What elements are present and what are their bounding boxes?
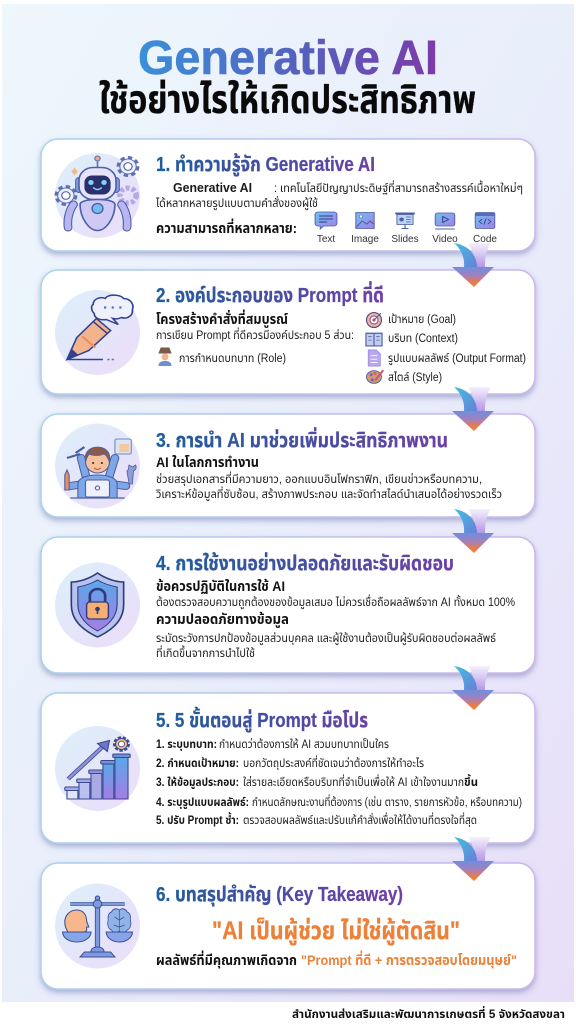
steps list: ขึ้น [464, 774, 478, 789]
item: output format [368, 350, 526, 366]
text block: การเขียน Prompt ที่ดีควรมีองค์ประกอบ 5 ส่วน: [156, 327, 354, 342]
panel 1: know generative AI [41, 139, 535, 251]
steps list: 4. ระบุรูปแบบผลลัพธ์: [156, 795, 249, 810]
icon: shield and padlock [55, 562, 140, 648]
text block: data safety: ระมัดระวังการปกป้องข้อมูลส่วนบุคคล และผู้ใช้งานต้องเป็นผู้รับผิดชอบต่อผลลัพธ์ [156, 631, 496, 645]
text block: : เทคโนโลยีปัญญาประดิษฐ์ที่สามารถสร้างสรรค์เนื้อหาใหม่ๆ [274, 180, 523, 195]
panel 3: productivity [41, 414, 535, 517]
text block [156, 309, 354, 342]
arrow 4 to 5 [452, 666, 494, 710]
icon: text [315, 212, 337, 245]
text block: ความสามารถที่หลากหลาย: [156, 218, 297, 236]
icon: video [432, 213, 458, 245]
item: role: การกำหนดบทบาท (Role) [179, 352, 286, 365]
arrow 3 to 4 [452, 509, 494, 553]
arrow 5 to 6 [452, 837, 494, 881]
icon: code: Code [473, 234, 497, 245]
heading: 5. 5 ขั้นตอนสู่ Prompt มือโปร [156, 707, 368, 732]
title [99, 32, 476, 122]
steps list: กำหนดว่าต้องการให้ AI สวมบทบาทเป็นใคร [219, 737, 389, 751]
item: output format: รูปแบบผลลัพธ์ (Output Format) [388, 352, 526, 365]
steps list [156, 737, 522, 827]
text block: Generative AI [173, 180, 252, 195]
text block: guidelines: ต้องตรวจสอบความถูกต้องของข้อมูลเสมอ ไม่ควรเชื่อถือผลลัพธ์จาก AI ทั้งหมด 100% [156, 594, 515, 609]
heading: 4. การใช้งานอย่างปลอดภัยและรับผิดชอบ [156, 553, 454, 575]
callout quote: "AI เป็นผู้ช่วย ไม่ใช่ผู้ตัดสิน" [212, 917, 460, 946]
panel 4: safe use [41, 537, 535, 673]
text block: data safety: ความปลอดภัยทางข้อมูล [156, 611, 289, 629]
text block: data safety [156, 611, 496, 660]
icon: robot [55, 153, 140, 238]
panel 5: five steps [41, 693, 535, 843]
icon: image: Image [351, 234, 379, 245]
text block: โครงสร้างคำสั่งที่สมบูรณ์ [156, 309, 288, 329]
arrow 2 to 3 [452, 387, 494, 431]
icon: slides [391, 212, 419, 245]
text block: วิเคราะห์ข้อมูลที่ซับซ้อน, สร้างภาพประกอบ และจัดทำสไลด์นำเสนอได้อย่างรวดเร็ว [156, 486, 502, 501]
steps list: ตรวจสอบผลลัพธ์และปรับแก้คำสั่งเพื่อให้ได้งานที่ตรงใจที่สุด [243, 812, 477, 827]
text block: "Prompt ที่ดี + การตรวจสอบโดยมนุษย์" [301, 950, 517, 969]
icon: balance scale [55, 884, 140, 968]
icon: video: Video [432, 234, 458, 245]
text block [156, 454, 502, 501]
steps list: บอกวัตถุประสงค์ที่ชัดเจนว่าต้องการให้ทำอะไร [243, 755, 424, 770]
panel 2: prompt elements [41, 270, 535, 394]
text block: ผลลัพธ์ที่มีคุณภาพเกิดจาก [156, 950, 297, 969]
item: goal: เป้าหมาย (Goal) [388, 313, 456, 326]
footer credit: สำนักงานส่งเสริมและพัฒนาการเกษตรที่ 5 จังหวัดสงขลา [292, 1006, 565, 1021]
steps list: กำหนดลักษณะงานที่ต้องการ (เช่น ตาราง, รายการหัวข้อ, หรือบทความ) [252, 794, 522, 809]
text block: guidelines [156, 578, 515, 609]
steps list: ใส่รายละเอียดหรือบริบทที่จำเป็นเพื่อให้ AI เข้าใจงานมาก [243, 774, 464, 789]
icon: multitasking person [55, 424, 140, 508]
title: Generative AI [138, 32, 438, 85]
icon: code [473, 212, 497, 245]
item: context: บริบท (Context) [388, 333, 458, 345]
heading: 1. ทำความรู้จัก Generative AI [156, 154, 375, 176]
item: style [367, 370, 442, 384]
steps list: 3. ให้ข้อมูลประกอบ: [156, 775, 239, 790]
text block: AI ในโลกการทำงาน [156, 454, 259, 470]
item: role [158, 348, 286, 366]
panel 6: key takeaway [41, 863, 535, 989]
text block [156, 950, 517, 969]
item: context [366, 333, 458, 346]
steps list: 2. กำหนดเป้าหมาย: [156, 757, 239, 770]
heading: 2. องค์ประกอบของ Prompt ที่ดี [156, 281, 384, 307]
text block [155, 180, 523, 236]
text block: data safety: ที่เกิดขึ้นจากการนำไปใช้ [156, 645, 255, 660]
steps list: 1. ระบุบทบาท: [156, 739, 217, 751]
heading: 3. การนำ AI มาช่วยเพิ่มประสิทธิภาพงาน [156, 427, 448, 452]
icon: growth chart [55, 726, 140, 811]
icon: text: Text [317, 234, 335, 245]
heading: 6. บทสรุปสำคัญ (Key Takeaway) [156, 884, 403, 906]
text block: ช่วยสรุปเอกสารที่มีความยาว, ออกแบบอินโฟกราฟิก, เขียนข่าวหรือบทความ, [156, 471, 482, 486]
icon: slides: Slides [391, 234, 419, 245]
icon: image [351, 212, 379, 245]
text block: guidelines: ข้อควรปฏิบัติในการใช้ AI [156, 578, 285, 594]
arrow 1 to 2 [452, 243, 494, 287]
icon: pencil and speech bubble [55, 290, 140, 375]
item: style: สไตล์ (Style) [388, 371, 442, 384]
steps list: 5. ปรับ Prompt ซ้ำ: [156, 812, 239, 827]
text block: ได้หลากหลายรูปแบบตามคำสั่งของผู้ใช้ [155, 196, 318, 210]
item: goal [367, 313, 456, 327]
title: ใช้อย่างไรให้เกิดประสิทธิภาพ [99, 79, 476, 122]
